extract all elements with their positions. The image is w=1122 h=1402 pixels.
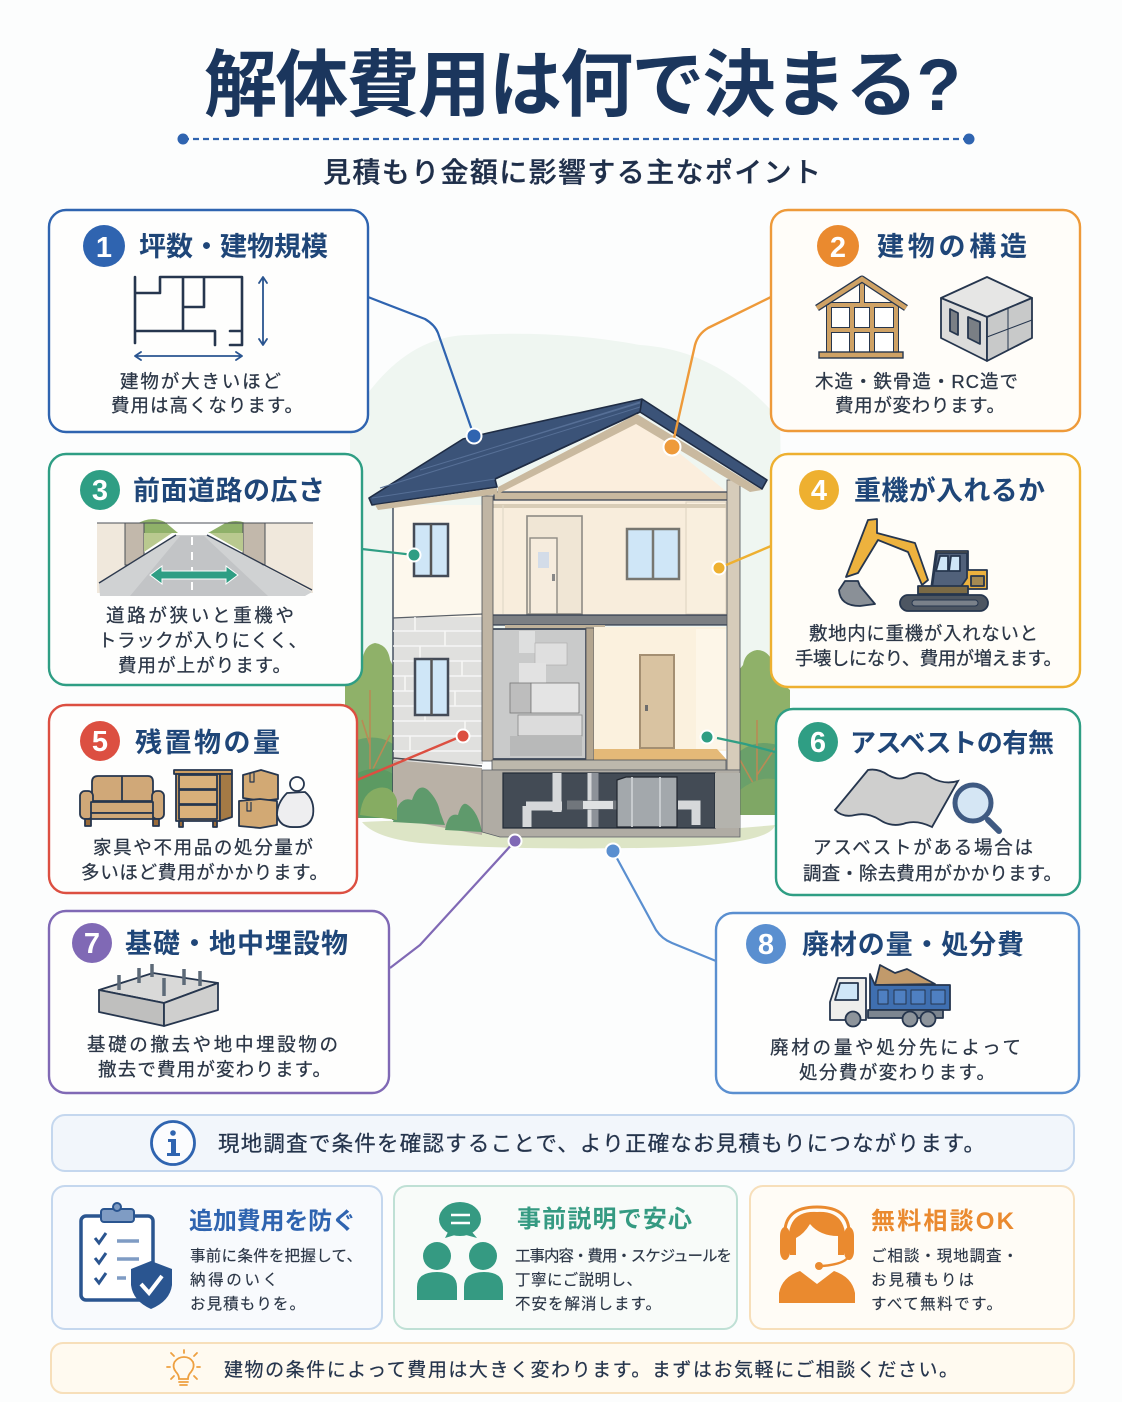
- number badge 3: [80, 470, 120, 510]
- roof: [369, 399, 767, 510]
- panel: 7 基礎・地中埋設物: [49, 911, 389, 1093]
- text: 敷地内に重機が入れないと: [809, 623, 1038, 644]
- basement: [482, 770, 740, 837]
- number badge 4: [799, 470, 839, 510]
- heading: 重機が入れるか: [854, 475, 1045, 506]
- text: [815, 371, 1018, 416]
- icon: foundation: [99, 964, 218, 1026]
- number badge 3: 3: [92, 475, 108, 507]
- text: お見積もりは: [871, 1271, 974, 1289]
- icon: excavator: [839, 519, 988, 611]
- text: 多いほど費用がかかります。: [81, 862, 328, 883]
- text: 費用が上がります。: [118, 655, 291, 676]
- icon: light bulb: [167, 1350, 200, 1385]
- text: 建物の条件によって費用は大きく変わります。まずはお気軽にご相談ください。: [224, 1359, 958, 1381]
- heading: 無料相談OK: [871, 1208, 1015, 1235]
- icon: dump truck: [830, 965, 950, 1026]
- text: 建物が大きいほど: [120, 371, 281, 392]
- icon: floor plan: [135, 277, 267, 360]
- number badge 7: 7: [84, 928, 100, 960]
- text: [87, 1034, 338, 1080]
- gable: [497, 417, 727, 492]
- icon: dresser: [174, 770, 232, 827]
- title: 解体費用は何で決まる?: [204, 45, 961, 126]
- number badge 6: [798, 722, 838, 762]
- number badge 7: [72, 923, 112, 963]
- text: [803, 837, 1062, 884]
- heading: アスベストの有無: [850, 728, 1054, 758]
- number badge 4: 4: [811, 475, 827, 507]
- icon: two people with speech bubble: [417, 1202, 503, 1300]
- text: 現地調査で条件を確認することで、より正確なお見積もりにつながります。: [218, 1132, 985, 1156]
- text: 費用は高くなります。: [111, 395, 303, 416]
- concrete room: [492, 629, 586, 759]
- heading: 前面道路の広さ: [133, 476, 325, 506]
- number badge 6: 6: [810, 727, 826, 759]
- window: [414, 524, 448, 576]
- text: 事前に条件を把握して、: [190, 1247, 362, 1265]
- door upper: [527, 516, 582, 614]
- subtitle: 見積もり金額に影響する主なポイント: [323, 157, 821, 188]
- upper room: [488, 492, 733, 622]
- leader lines and dots: [357, 297, 775, 968]
- number badge 2: 2: [830, 232, 846, 264]
- text: [98, 605, 307, 676]
- panel: 4 重機が入れるか: [771, 454, 1080, 687]
- text: ご相談・現地調査・: [871, 1247, 1018, 1265]
- text: [81, 837, 328, 883]
- text: 丁寧にご説明し、: [515, 1271, 642, 1289]
- lower room: [594, 627, 727, 760]
- text: 処分費が変わります。: [799, 1062, 995, 1083]
- text: [515, 1247, 732, 1313]
- text: 道路が狭いと重機や: [106, 605, 294, 626]
- text: [871, 1247, 1018, 1313]
- left wall: [393, 505, 483, 835]
- number badge 5: [80, 721, 120, 761]
- text: 工事内容・費用・スケジュールを: [515, 1247, 732, 1265]
- number badge 5: 5: [92, 726, 108, 758]
- text: 基礎の撤去や地中埋設物の: [87, 1034, 338, 1055]
- trees: [345, 643, 790, 818]
- panel: 3 前面道路の広さ: [49, 454, 362, 685]
- text: 手壊しになり、費用が増えます。: [795, 648, 1062, 669]
- icon: road: [97, 519, 313, 596]
- text: 家具や不用品の処分量が: [93, 837, 313, 858]
- heading: 基礎・地中埋設物: [125, 929, 348, 959]
- panel: 6 アスベストの有無: [776, 709, 1080, 895]
- panel: 5 残置物の量: [49, 705, 357, 893]
- panel: 2 建物の構造: [771, 210, 1080, 431]
- window: [627, 529, 679, 579]
- text: 調査・除去費用がかかります。: [803, 863, 1062, 884]
- icon: boxes and bag: [239, 770, 313, 828]
- text: [795, 623, 1062, 669]
- house illustration: [345, 334, 790, 848]
- heading: 事前説明で安心: [517, 1206, 692, 1233]
- text: [770, 1037, 1021, 1083]
- ground: [362, 820, 775, 848]
- text: [190, 1247, 362, 1313]
- heading: 追加費用を防ぐ: [189, 1208, 356, 1235]
- text: [111, 371, 303, 416]
- number badge 1: 1: [96, 232, 112, 264]
- number badge 1: [83, 225, 125, 267]
- floor slab: [488, 615, 730, 631]
- post: [586, 628, 594, 760]
- panel: 8 廃材の量・処分費: [716, 913, 1079, 1093]
- number badge 8: [746, 924, 786, 964]
- icon: clipboard and shield: [81, 1203, 172, 1309]
- text: 納得のいく: [190, 1271, 278, 1289]
- callout: bottom bar: [51, 1343, 1074, 1393]
- text: 撤去で費用が変わります。: [98, 1059, 331, 1080]
- panel: 事前説明で安心: [394, 1186, 737, 1329]
- callout: survey info bar: [52, 1115, 1074, 1171]
- panel: 1 坪数・建物規模: [49, 210, 368, 432]
- heading: 廃材の量・処分費: [802, 930, 1024, 960]
- icon: asbestos sheet: [835, 770, 958, 827]
- text: 不安を解消します。: [515, 1295, 661, 1313]
- number badge 8: 8: [758, 929, 774, 961]
- text: 木造・鉄骨造・RC造で: [815, 371, 1018, 392]
- panel: 無料相談OK: [750, 1186, 1074, 1329]
- text: 廃材の量や処分先によって: [770, 1037, 1021, 1058]
- icon: info: [152, 1122, 194, 1164]
- icon: concrete block: [941, 277, 1032, 361]
- heading: 坪数・建物規模: [139, 232, 328, 262]
- panel: 追加費用を防ぐ: [52, 1186, 382, 1329]
- text: 費用が変わります。: [835, 395, 1005, 416]
- bushes: [360, 788, 482, 832]
- structural posts: [482, 480, 740, 770]
- heading: 残置物の量: [135, 728, 280, 758]
- icon: wood frame: [817, 279, 906, 358]
- window: [415, 659, 448, 715]
- title divider: [178, 134, 974, 144]
- number badge 2: [817, 225, 859, 267]
- heading: 建物の構造: [877, 232, 1027, 262]
- icon: operator with headset: [779, 1207, 855, 1303]
- icon: sofa: [80, 776, 164, 826]
- icon: magnifier: [955, 785, 999, 831]
- text: トラックが入りにくく、: [98, 630, 307, 651]
- text: アスベストがある場合は: [813, 837, 1033, 858]
- text: お見積もりを。: [190, 1295, 305, 1313]
- door lower: [640, 655, 674, 748]
- text: すべて無料です。: [871, 1295, 1002, 1313]
- gable beam: [494, 492, 732, 500]
